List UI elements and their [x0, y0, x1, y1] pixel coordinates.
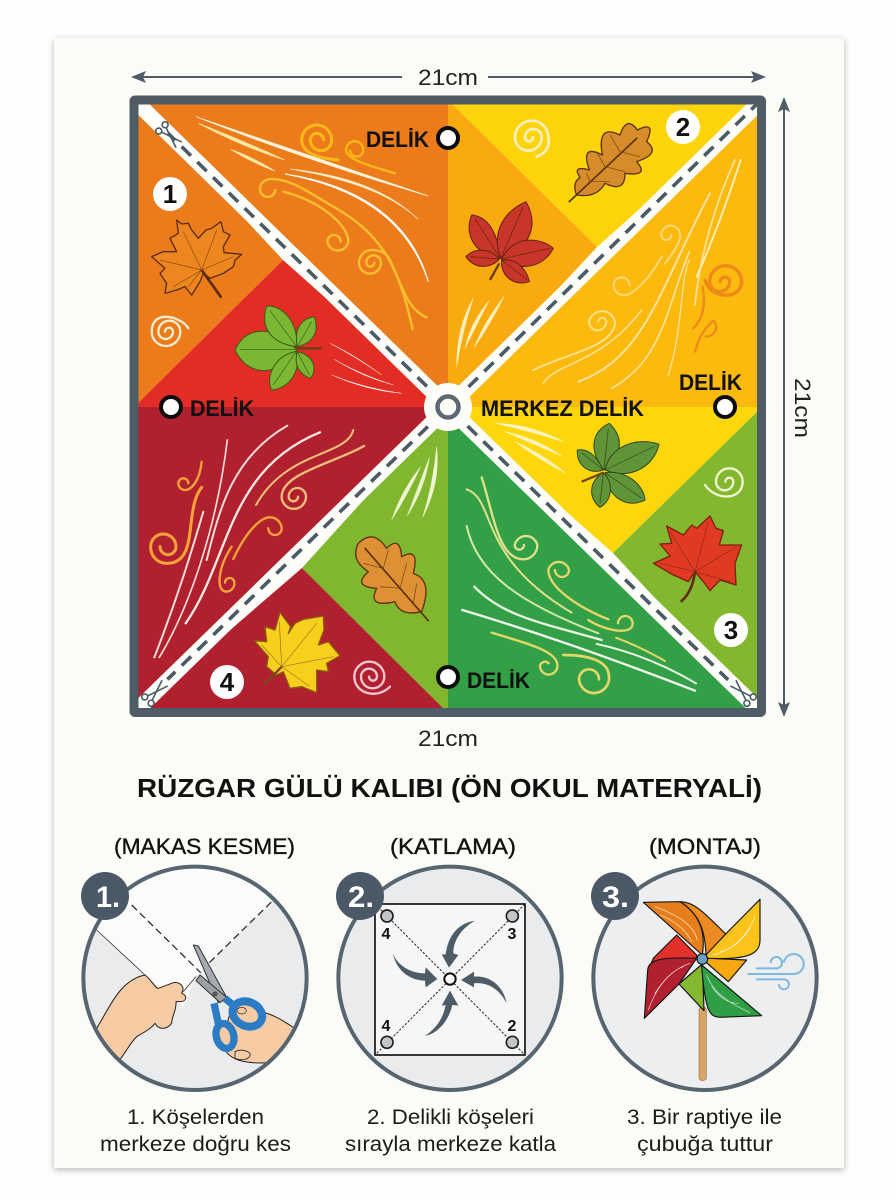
icon: orange maple leaf — [152, 220, 242, 297]
bottom-right quadrant art — [462, 423, 743, 693]
top-left quadrant art — [152, 117, 428, 393]
blade decorations — [648, 907, 755, 1013]
pattern outer frame — [134, 100, 762, 712]
caption step 2: sırayla merkeze katla — [345, 1133, 556, 1156]
top width dimension arrow — [131, 65, 766, 90]
icon: brown oak leaf — [569, 124, 652, 202]
caption step 1: 1. Köşelerden — [127, 1106, 264, 1129]
title: RÜZGAR GÜLÜ KALIBI (ÖN OKUL MATERYALİ) — [137, 773, 762, 803]
icon: yellow maple leaf — [254, 612, 340, 693]
wind swirls: dark red panel — [151, 426, 437, 694]
hole: right — [715, 397, 735, 417]
wind streaks: red panel — [330, 343, 402, 393]
icon: green chestnut leaf — [235, 306, 322, 390]
wind swirls: yellow panel — [457, 121, 742, 388]
number badge 3 — [714, 613, 748, 647]
step badge number 3: 3. — [602, 881, 629, 914]
corner holes — [381, 910, 518, 1048]
right height dimension arrow — [778, 97, 815, 717]
icon: wind — [748, 954, 804, 989]
step badge number 2: 2. — [348, 881, 374, 914]
heading: cutting: (MAKAS KESME) — [114, 834, 295, 859]
label: bottom hole: DELİK — [467, 668, 530, 693]
icon: left hand — [96, 974, 186, 1059]
folding square — [375, 904, 525, 1055]
number badge 2 — [666, 110, 700, 144]
number badge 1: 1 — [163, 179, 177, 209]
number badge 1 — [153, 177, 187, 211]
caption step 1: merkeze doğru kes — [100, 1133, 291, 1156]
step badge 2 — [336, 872, 384, 920]
step badge 1 — [81, 872, 129, 920]
corner number bottom-left: 4 — [382, 1018, 391, 1035]
icon: scissors — [193, 945, 266, 1060]
hole: bottom — [438, 667, 458, 687]
hole: top — [438, 128, 458, 148]
corner number top-left: 4 — [382, 926, 391, 943]
wind swirls: orange panel — [152, 117, 428, 346]
icon: red chestnut leaf — [466, 202, 553, 283]
number badge 2: 2 — [676, 112, 690, 142]
hole: left — [161, 397, 181, 417]
dotted diagonals — [375, 904, 525, 1055]
right height dimension arrow: 21cm — [790, 378, 815, 438]
number badge 4 — [210, 665, 244, 699]
top width dimension arrow: 21cm — [418, 65, 478, 90]
centre hole — [424, 383, 472, 431]
step 1 circle: cutting — [81, 860, 310, 1090]
label: centre hole: MERKEZ DELİK — [481, 396, 644, 421]
heading: assembly: (MONTAJ) — [649, 834, 761, 859]
corner number bottom-right: 2 — [508, 1018, 517, 1035]
caption step 3: 3. Bir raptiye ile — [627, 1106, 782, 1129]
cut lines: diagonal dashed strips — [130, 96, 766, 717]
hub — [697, 954, 708, 964]
colour panels — [134, 100, 762, 713]
step 3 circle: assembled pinwheel — [591, 867, 817, 1090]
step 2 circle: folding — [336, 867, 562, 1090]
label: top hole: DELİK — [366, 127, 429, 152]
number badge 3: 3 — [724, 615, 738, 645]
top-right quadrant art — [457, 121, 742, 388]
wind swirls: green panel — [462, 423, 743, 693]
step badge number 1: 1. — [96, 881, 120, 914]
centre hole — [444, 973, 456, 985]
icon: right hand — [226, 1012, 294, 1064]
label: left hole: DELİK — [190, 396, 254, 421]
caption step 3: çubuğa tuttur — [637, 1133, 773, 1156]
corner number top-right: 3 — [508, 926, 517, 943]
icon: oak leaf on green — [356, 537, 428, 621]
icon: scissors bottom-right — [728, 678, 757, 707]
icon: red maple leaf — [653, 516, 742, 601]
stick — [699, 1007, 706, 1081]
ring — [83, 867, 307, 1090]
label: right hole: DELİK — [679, 370, 742, 395]
heading: folding: (KATLAMA) — [390, 834, 516, 859]
number badge 4: 4 — [220, 667, 235, 697]
white paper sector — [97, 868, 272, 1006]
pinwheel pattern square — [130, 96, 766, 717]
dashed cut lines — [132, 902, 272, 973]
bottom-left quadrant art — [151, 426, 437, 694]
icon: scissors top-left — [155, 121, 184, 150]
icon: green chestnut leaf on yellow — [577, 423, 659, 507]
icon: scissors bottom-left — [141, 678, 170, 707]
pinwheel blades — [643, 899, 762, 1018]
curved fold arrows — [393, 921, 507, 1036]
caption step 2: 2. Delikli köşeleri — [367, 1106, 534, 1129]
step badge 3 — [591, 872, 639, 920]
bottom width label: 21cm — [418, 726, 478, 751]
